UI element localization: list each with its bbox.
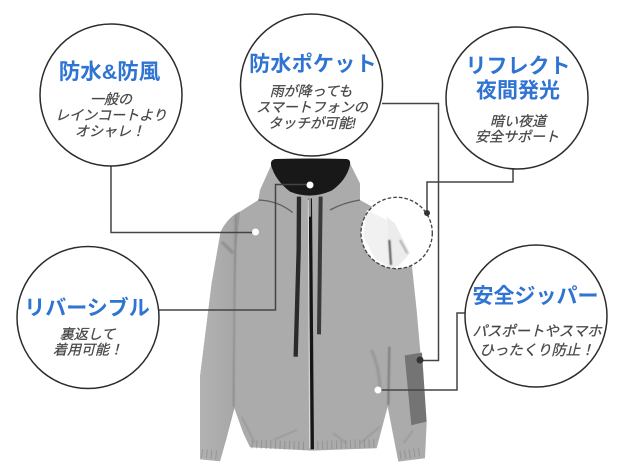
heading: 防水ポケット	[249, 53, 377, 76]
connector: waterproof pocket to sleeve pocket	[382, 104, 438, 364]
description: パスポートやスマホ	[472, 324, 602, 340]
left drawstring	[296, 197, 299, 357]
heading: 安全ジッパー	[472, 285, 598, 308]
description: 裏返して	[60, 326, 115, 342]
gathered hem and cuffs	[202, 443, 422, 455]
description: 着用可能！	[53, 342, 123, 358]
body folds	[222, 215, 413, 443]
heading: リフレクト	[466, 55, 570, 78]
heading: 防水&防風	[59, 60, 161, 84]
zipper	[310, 198, 312, 449]
connector: safety zipper to jacket pocket	[374, 313, 465, 394]
heading: リバーシブル	[24, 296, 150, 320]
description: レインコートより	[55, 107, 167, 123]
panel: reflective night glow	[446, 27, 588, 169]
panel: waterproof and windproof	[40, 24, 182, 166]
description: スマートフォンの	[256, 99, 369, 115]
jacket silhouette	[200, 163, 427, 462]
description: 暗い夜道	[490, 113, 546, 129]
panel: safety zipper	[465, 245, 607, 387]
jacket	[200, 158, 432, 462]
description: オシャレ！	[75, 123, 145, 139]
panel: reversible	[17, 246, 159, 388]
zoom lens detail	[361, 197, 432, 269]
connector: reversible to hood	[159, 182, 314, 310]
description: 一般の	[90, 91, 132, 107]
heading: 夜間発光	[476, 80, 560, 102]
description: 雨が降っても	[270, 83, 352, 99]
connector: waterproof and windproof to jacket shoulder	[111, 166, 259, 236]
sleeve pocket patch	[405, 353, 427, 425]
hood seams	[258, 200, 360, 213]
description: タッチが可能!	[268, 115, 356, 131]
description: ひったくり防止！	[479, 342, 595, 359]
panel: waterproof pocket	[240, 14, 382, 156]
hood lining	[271, 158, 350, 196]
left sleeve shading	[200, 212, 240, 461]
connector: reflective to lens	[424, 169, 513, 216]
description: 安全サポート	[475, 128, 559, 144]
right drawstring	[319, 197, 321, 334]
